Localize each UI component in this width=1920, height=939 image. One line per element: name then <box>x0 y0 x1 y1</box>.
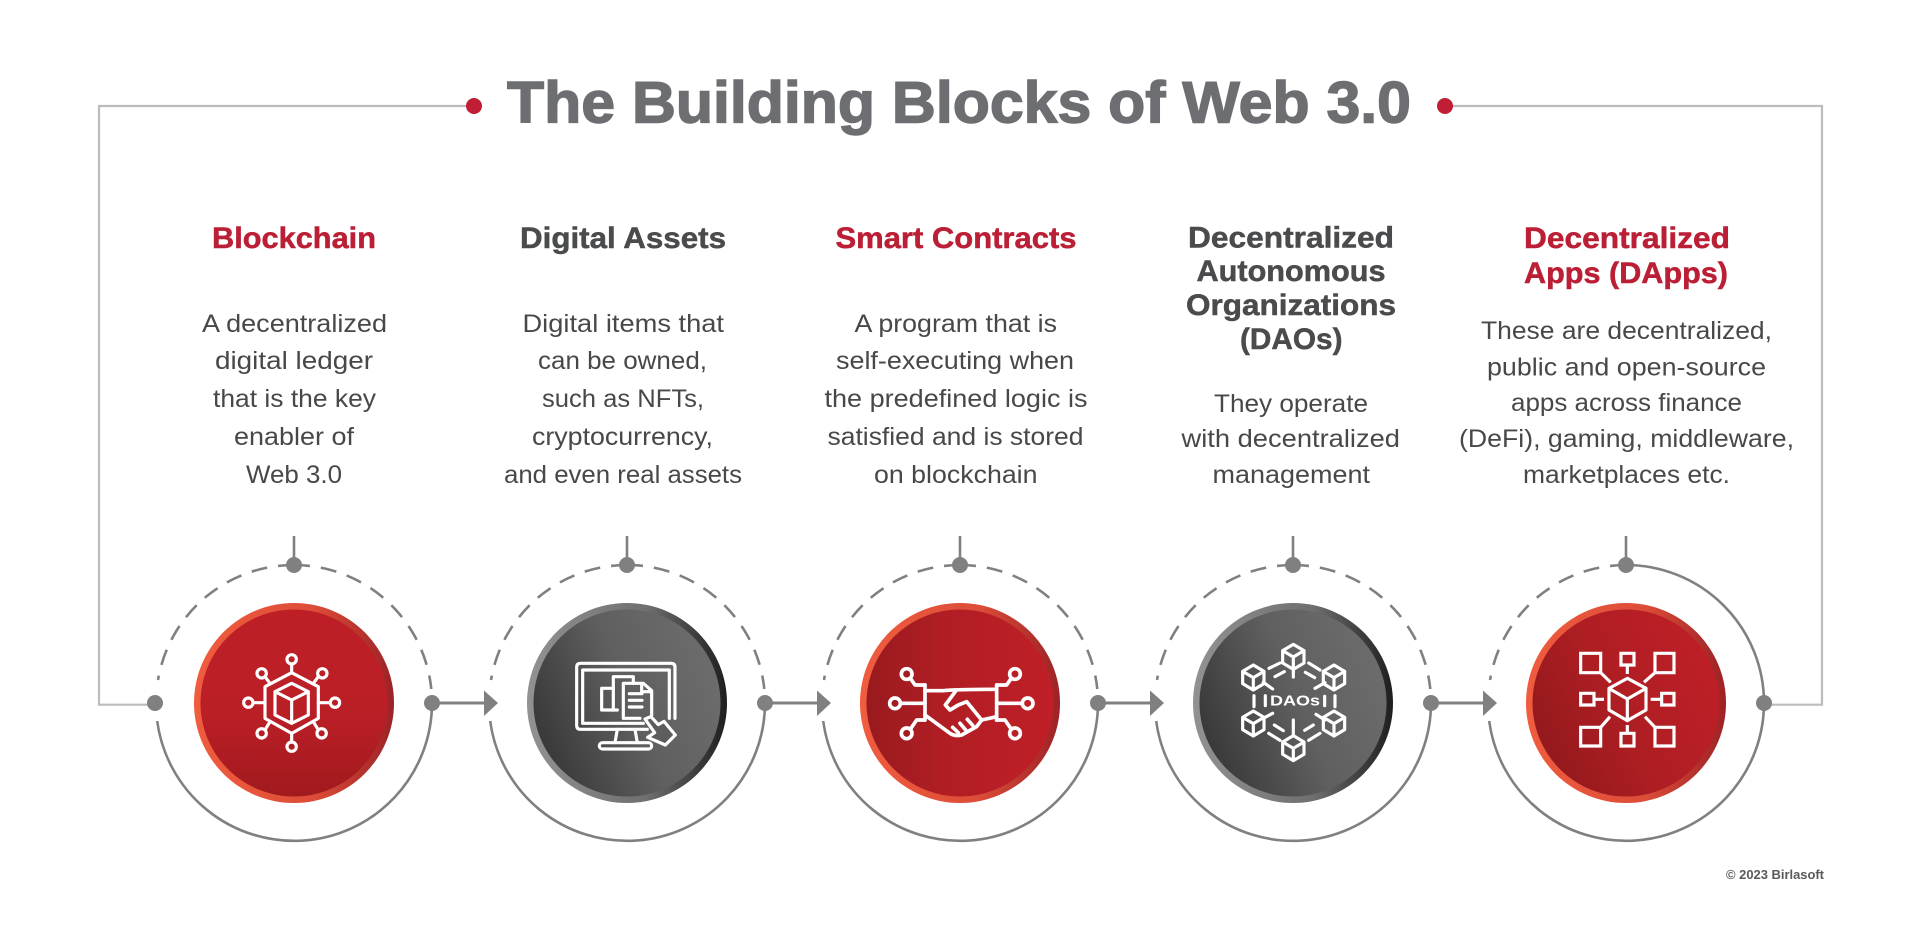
text: Smart Contracts description: the predefined logic is <box>824 385 1088 413</box>
heading: Decentralized Apps (DApps): Apps (DApps) <box>1524 257 1728 290</box>
ring 5 <box>1489 536 1772 841</box>
disc 2 <box>527 603 727 803</box>
text: Digital Assets description <box>504 310 742 489</box>
text: DAOs description: They operate <box>1214 390 1368 418</box>
text: DApps description: apps across finance <box>1511 389 1742 417</box>
heading: Decentralized Autonomous Organizations (DAOs): Organizations <box>1186 289 1396 322</box>
icon: DAOs cube network: DAOs <box>1270 694 1320 710</box>
text: Smart Contracts description: on blockchain <box>874 461 1038 489</box>
heading: Decentralized Autonomous Organizations (DAOs): (DAOs) <box>1240 323 1342 356</box>
column: Smart Contracts <box>824 222 1088 489</box>
icon: DAOs cube network <box>1243 644 1345 761</box>
text: Smart Contracts description <box>824 310 1088 489</box>
text: Digital Assets description: Digital items that <box>522 310 724 338</box>
node 2: Digital Assets ring and icon <box>490 536 773 841</box>
text: Smart Contracts description: A program that is <box>854 310 1057 338</box>
text: Smart Contracts description: self-executing when <box>836 347 1074 375</box>
node 3: Smart Contracts ring and icon <box>823 536 1106 841</box>
text: DAOs description <box>1180 390 1400 489</box>
text: Blockchain description: digital ledger <box>215 347 373 375</box>
disc 4 <box>1193 603 1393 803</box>
text: Blockchain description: that is the key <box>213 385 377 413</box>
arrow 3 <box>1098 690 1164 716</box>
column: DApps <box>1459 222 1794 489</box>
title dot right <box>1437 98 1453 114</box>
heading: Decentralized Apps (DApps): Decentralized <box>1524 222 1730 255</box>
text: Smart Contracts description: satisfied and is stored <box>828 423 1084 451</box>
node 5: DApps ring and icon <box>1489 536 1772 841</box>
text: Digital Assets description: cryptocurrency, <box>532 423 713 451</box>
heading: Decentralized Autonomous Organizations (DAOs): Decentralized <box>1188 222 1394 254</box>
disc 1 <box>194 603 394 803</box>
ring 1 <box>147 536 440 841</box>
text: DApps description: (DeFi), gaming, middleware, <box>1459 425 1794 453</box>
text: Digital Assets description: and even real assets <box>504 461 742 489</box>
heading: Decentralized Apps (DApps) <box>1524 222 1730 290</box>
column: Blockchain <box>202 222 387 489</box>
heading: Smart Contracts: Smart Contracts <box>836 222 1076 255</box>
column: Digital Assets <box>504 222 742 489</box>
node 1: Blockchain ring and icon <box>147 536 440 841</box>
text: DApps description: public and open-source <box>1487 354 1766 382</box>
copyright: © 2023 Birlasoft <box>1726 868 1825 882</box>
disc 3 <box>860 603 1060 803</box>
text: Blockchain description: Web 3.0 <box>246 461 342 489</box>
text: DAOs description: with decentralized <box>1180 425 1400 453</box>
title dot left <box>466 98 482 114</box>
text: Digital Assets description: can be owned, <box>538 347 707 375</box>
ring 4 <box>1156 536 1439 841</box>
column: DAOs <box>1180 222 1400 489</box>
icon: handshake with circuit nodes <box>890 669 1033 739</box>
title text: The Building Blocks of Web 3.0 <box>507 70 1411 136</box>
text: Blockchain description: A decentralized <box>202 310 387 338</box>
text: DApps description: These are decentralized, <box>1481 317 1772 345</box>
arrow 4 <box>1431 690 1497 716</box>
icon: cube in hexagon network <box>244 655 340 751</box>
icon: cube linked to squares <box>1581 653 1674 746</box>
heading: Digital Assets: Digital Assets <box>520 222 726 255</box>
node 4: DAOs ring and icon <box>1156 536 1439 841</box>
icon: monitor with documents and hand cursor <box>577 663 675 749</box>
arrow 1 <box>432 690 498 716</box>
disc 5 <box>1526 603 1726 803</box>
heading: Decentralized Autonomous Organizations (DAOs) <box>1186 222 1396 356</box>
text: Blockchain description <box>202 310 387 489</box>
heading: Blockchain: Blockchain <box>212 222 376 255</box>
ring 2 <box>490 536 773 841</box>
text: DApps description <box>1459 317 1794 489</box>
text: DAOs description: management <box>1212 461 1370 489</box>
heading: Decentralized Autonomous Organizations (DAOs): Autonomous <box>1196 255 1386 288</box>
ring 3 <box>823 536 1106 841</box>
text: Blockchain description: enabler of <box>234 423 354 451</box>
text: Digital Assets description: such as NFTs, <box>542 385 704 413</box>
text: DApps description: marketplaces etc. <box>1523 461 1730 489</box>
arrow 2 <box>765 690 831 716</box>
frame connector <box>99 106 1822 705</box>
title <box>466 70 1453 136</box>
